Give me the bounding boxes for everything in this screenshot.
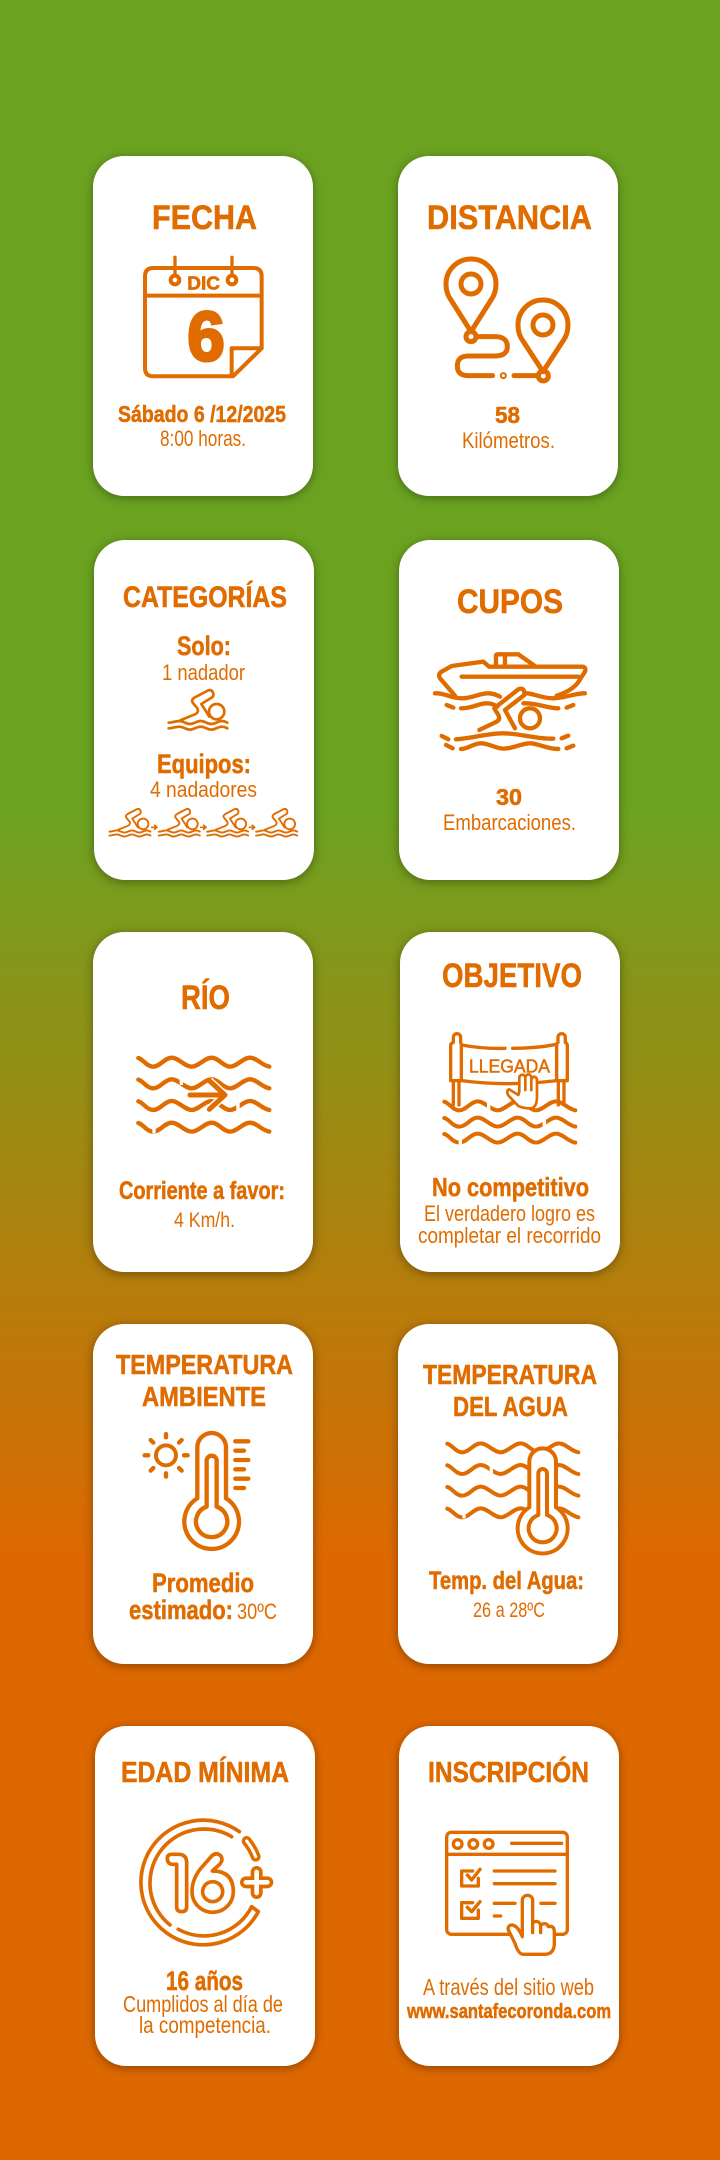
text: unit: Kilómetros. xyxy=(462,428,555,453)
text: time: 8:00 horas. xyxy=(160,426,246,451)
heading: temperatura del agua: DEL AGUA xyxy=(453,1391,568,1422)
text: current: Corriente a favor: xyxy=(119,1177,285,1205)
heading: temperatura del agua: TEMPERATURA xyxy=(423,1359,597,1390)
card: cupos xyxy=(399,540,619,880)
heading: fecha: FECHA xyxy=(152,199,257,237)
icon: water thermometer xyxy=(447,1443,578,1553)
heading: temperatura del agua xyxy=(423,1359,597,1422)
heading: objetivo: OBJETIVO xyxy=(442,957,582,995)
icon: finish banner xyxy=(444,1034,575,1145)
heading: cupos: CUPOS xyxy=(457,583,563,621)
text: description line 1: El verdadero logro es xyxy=(424,1201,595,1226)
card: inscripción xyxy=(399,1726,619,2066)
text: water temperature label: Temp. del Agua: xyxy=(429,1567,584,1595)
heading: temperatura ambiente xyxy=(116,1349,293,1412)
icon: 16 plus xyxy=(141,1820,267,1945)
heading: distancia: DISTANCIA xyxy=(427,199,592,237)
card: categorías xyxy=(94,540,314,880)
icon: calendar: DIC xyxy=(187,272,220,293)
icon: swimmer xyxy=(169,690,227,730)
text: speed: 4 Km/h. xyxy=(174,1209,235,1232)
card: temperatura ambiente xyxy=(93,1324,313,1664)
icon: web form with hand xyxy=(447,1832,567,1954)
text: website url: www.santafecoronda.com xyxy=(406,2001,611,2023)
text: condition line 2: la competencia. xyxy=(139,2012,271,2038)
text: not competitive: No competitivo xyxy=(432,1172,589,1202)
card: distancia xyxy=(398,156,618,496)
text: temperature value: 30ºC xyxy=(237,1599,277,1624)
text: one swimmer: 1 nadador xyxy=(162,660,245,685)
text: water temperature value: 26 a 28ºC xyxy=(473,1599,545,1622)
heading: inscripción: INSCRIPCIÓN xyxy=(428,1755,589,1789)
icon: finish banner: LLEGADA xyxy=(469,1055,550,1076)
icon: route pins xyxy=(446,259,568,381)
card: temperatura del agua xyxy=(398,1324,618,1664)
text: via website: A través del sitio web xyxy=(423,1974,594,2000)
card: edad mínima xyxy=(95,1726,315,2066)
card: fecha xyxy=(93,156,313,496)
card: objetivo xyxy=(400,932,620,1272)
heading: río: RÍO xyxy=(181,979,230,1017)
text: average label: Promedio xyxy=(152,1568,254,1598)
icon: team relay swimmers xyxy=(109,809,297,837)
text: equipos: Equipos: xyxy=(157,749,251,779)
text: date: Sábado 6 /12/2025 xyxy=(118,401,286,427)
text: description line 2: completar el recorrido xyxy=(418,1223,601,1248)
text: solo: Solo: xyxy=(177,631,231,661)
heading: temperatura ambiente: TEMPERATURA xyxy=(116,1349,293,1380)
card: río xyxy=(93,932,313,1272)
icon: calendar: 6 xyxy=(187,298,225,376)
text: unit: Embarcaciones. xyxy=(443,810,576,835)
text: number: 30 xyxy=(496,784,522,810)
text: number: 58 xyxy=(495,402,520,428)
heading: categorías: CATEGORÍAS xyxy=(123,580,287,614)
text: four swimmers: 4 nadadores xyxy=(150,777,257,802)
heading: edad mínima: EDAD MÍNIMA xyxy=(121,1755,289,1789)
icon: calendar xyxy=(145,257,262,376)
text: estimated label: estimado: xyxy=(129,1595,233,1625)
icon: sun and thermometer xyxy=(145,1433,248,1549)
text: age: 16 años xyxy=(166,1966,243,1996)
text: condition line 1: Cumplidos al día de xyxy=(123,1991,283,2017)
icon: river current xyxy=(138,1058,269,1133)
icon: boat and swimmer xyxy=(435,654,585,749)
heading: temperatura ambiente: AMBIENTE xyxy=(142,1381,266,1412)
